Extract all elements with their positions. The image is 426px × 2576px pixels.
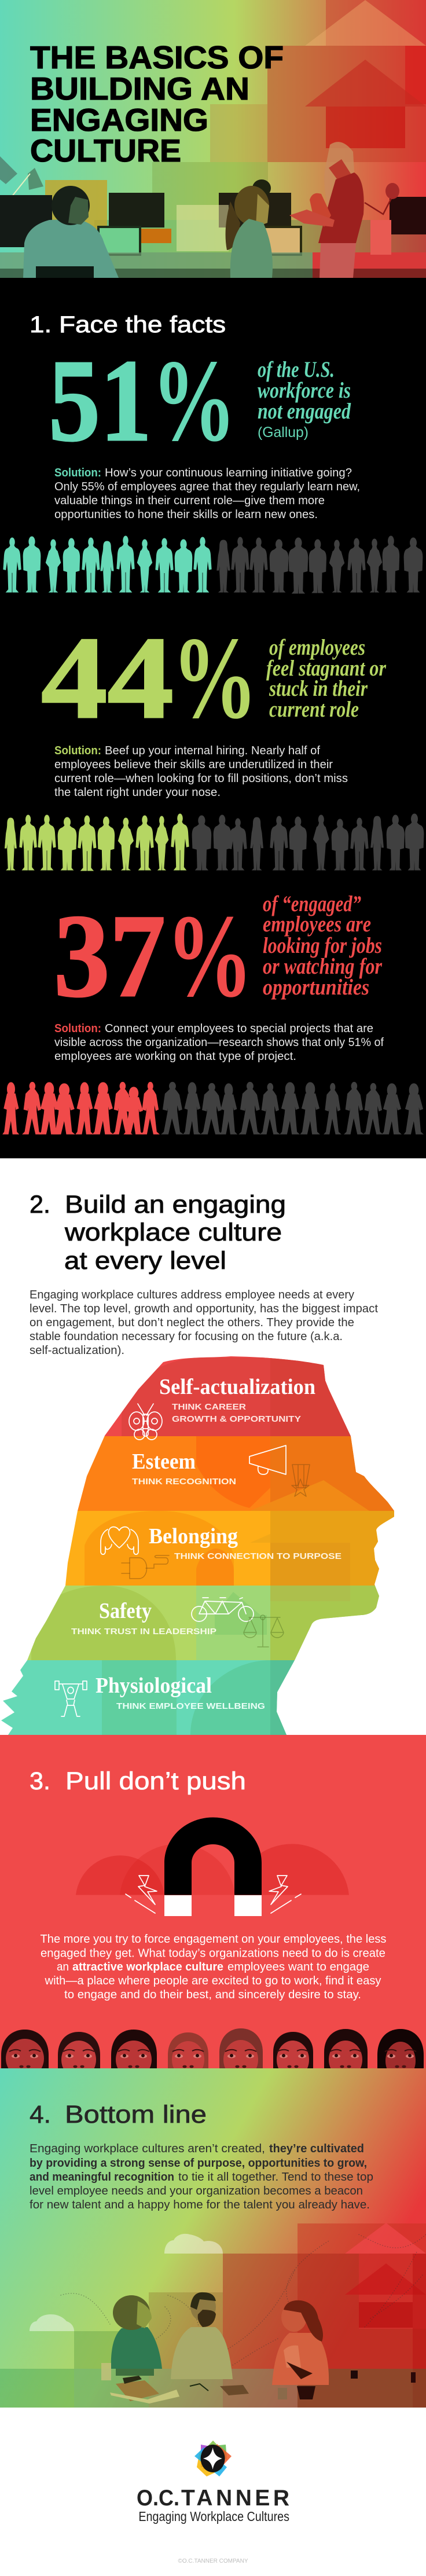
stat description: [266, 635, 387, 722]
row of faces: [1, 2028, 424, 2080]
level: physiological: [55, 1674, 265, 1716]
solution text 1: Solution:: [54, 467, 101, 479]
solution text 3: Solution:: [54, 1022, 101, 1035]
icon: megaphone: [249, 1445, 286, 1474]
solution text 2: the talent right under your nose.: [54, 786, 221, 799]
man with beard: [171, 2292, 233, 2379]
stat: 51%: [49, 335, 351, 465]
photo: standing woman: [289, 142, 364, 278]
level: self-actualization: GROWTH & OPPORTUNITY: [172, 1414, 301, 1424]
panel: build an engaging workplace culture: [1, 1195, 394, 1735]
solution text 2: Beef up your internal hiring. Nearly half of: [105, 744, 320, 757]
intro paragraph: level. The top level, growth and opportunity, has the biggest impact: [30, 1302, 378, 1315]
level: belonging: THINK CONNECTION TO PURPOSE: [174, 1551, 341, 1561]
icon: plug: [122, 1555, 169, 1579]
level: esteem: [132, 1445, 310, 1496]
big number: %: [172, 612, 258, 743]
stat description: workforce is: [258, 378, 351, 403]
big number: [49, 335, 236, 465]
solution text 3: employees are working on that type of project.: [54, 1050, 296, 1063]
heading: 2. Build an engaging workplace culture at every level: at every level: [64, 1247, 226, 1275]
intro paragraph: stable foundation necessary for focusing on the future (a.k.a.: [30, 1330, 343, 1343]
panel: footer: [0, 2408, 426, 2576]
tagline: Engaging Workplace Cultures: [138, 2509, 289, 2524]
heading: 2. Build an engaging workplace culture at every level: [30, 1191, 286, 1275]
big number: [41, 612, 258, 743]
icon: scales: [244, 1615, 284, 1647]
icon: trophy and star: [292, 1465, 310, 1496]
solution text 2: [54, 744, 348, 799]
icon: heart in hands: [101, 1527, 138, 1554]
title: ENGAGING: [30, 102, 208, 138]
solution text 3: Connect your employees to special projects that are: [105, 1022, 373, 1035]
big number: 37: [54, 890, 166, 1022]
heading: 4. Bottom line: Bottom line: [65, 2101, 207, 2129]
panel: header hero: [0, 0, 426, 278]
stat description: [258, 357, 351, 441]
intro paragraph: self-actualization).: [30, 1344, 124, 1357]
heading: 2. Build an engaging workplace culture at every level: Build an engaging: [65, 1191, 286, 1219]
paragraph: [41, 1933, 387, 2001]
logo wordmark: O.C.: [137, 2486, 179, 2511]
solution text 1: How’s your continuous learning initiative going?: [105, 467, 352, 479]
logo wordmark: TANNER: [181, 2486, 289, 2511]
paragraph: with—a place where people are excited to go to work, find it easy: [44, 1975, 381, 1987]
background domes: [76, 1844, 349, 1895]
level: physiological: THINK EMPLOYEE WELLBEING: [116, 1701, 265, 1711]
level: self-actualization: [129, 1375, 315, 1440]
decorative blocks and arrows: [94, 0, 426, 278]
stat description: not engaged: [258, 399, 351, 424]
stat description: looking for jobs: [263, 933, 382, 958]
people row: 44% highlighted: [5, 814, 424, 871]
intro paragraph: Engaging workplace cultures address employee needs at every: [30, 1289, 354, 1301]
title: THE BASICS OF: [30, 39, 284, 75]
solution text 2: current role—when looking for to fill positions, don’t miss: [54, 772, 348, 785]
stat description: employees are: [263, 912, 371, 937]
woman with ponytail: [272, 2300, 329, 2385]
stat description: (Gallup): [258, 424, 309, 441]
stat description: opportunities: [263, 975, 369, 1000]
level: esteem: THINK RECOGNITION: [132, 1477, 236, 1487]
level: esteem: Esteem: [132, 1450, 196, 1474]
paragraph: by providing a strong sense of purpose, opportunities to grow,: [30, 2157, 367, 2170]
logo mark: [194, 2441, 232, 2476]
paragraph: an: [57, 1961, 69, 1973]
paragraph: to tie it all together. Tend to these top: [178, 2171, 373, 2184]
stat: 44%: [41, 612, 387, 743]
big number: 44: [41, 612, 174, 743]
people row: 37% highlighted: [3, 1082, 423, 1134]
people row: 51% highlighted: [3, 536, 423, 593]
title: CULTURE: [30, 133, 181, 168]
big number: %: [152, 335, 236, 465]
paragraph: employees want to engage: [227, 1961, 369, 1973]
paragraph: for new talent and a happy home for the talent you already have.: [30, 2199, 370, 2211]
woman with curly hair: [111, 2295, 162, 2376]
heading: 3. Pull don't push: 3.: [30, 1767, 50, 1795]
table items: [101, 2363, 416, 2403]
solution text 1: opportunities to hone their skills or learn new ones.: [54, 508, 318, 521]
level: safety: [71, 1598, 284, 1647]
big number: %: [166, 890, 253, 1022]
level: physiological: Physiological: [96, 1674, 212, 1698]
big number: [54, 890, 253, 1022]
level: self-actualization: Self-actualization: [159, 1375, 315, 1399]
solution text 2: Solution:: [54, 744, 101, 757]
title: [30, 39, 284, 168]
stat: 37%: [54, 890, 383, 1022]
stat description: of employees: [269, 635, 365, 660]
stat description: of the U.S.: [258, 357, 335, 382]
heading: 4. Bottom line: 4.: [30, 2101, 51, 2129]
icon: clouds: [30, 2234, 223, 2331]
level: safety: Safety: [99, 1599, 152, 1623]
solution text 1: valuable things in their current role—give them more: [54, 494, 325, 507]
panel: face the facts: [0, 278, 426, 1158]
stat description: feel stagnant or: [266, 656, 387, 681]
level: belonging: Belonging: [149, 1524, 238, 1548]
paragraph: to engage and do their best, and sincerely desire to stay.: [64, 1988, 361, 2001]
heading: 2. Build an engaging workplace culture at every level: 2.: [30, 1191, 50, 1219]
icon: tandem bicycle: [192, 1598, 254, 1621]
head silhouette color bands: [0, 1355, 426, 1735]
level: belonging: [101, 1524, 341, 1579]
solution text 1: [54, 467, 360, 521]
stat description: [263, 891, 383, 1000]
solution text 2: employees believe their skills are underutilized in their: [54, 758, 333, 771]
solution text 3: visible across the organization—research shows that only 51% of: [54, 1036, 384, 1049]
heading: 3. Pull don't push: Pull don’t push: [65, 1767, 246, 1795]
solution text 1: Only 55% of employees agree that they regularly learn new,: [54, 480, 360, 493]
title: BUILDING AN: [30, 71, 249, 107]
heading: 2. Build an engaging workplace culture at every level: workplace culture: [64, 1219, 282, 1246]
office photo: [0, 156, 426, 278]
stat description: or watching for: [263, 954, 383, 979]
paragraph: they’re cultivated: [269, 2142, 364, 2155]
icon: lightning bolts: [126, 1876, 301, 1913]
background blocks and arrows: [74, 2223, 426, 2408]
icon: butterfly: [129, 1404, 162, 1440]
heading: 1. Face the facts: 1. Face the facts: [30, 312, 226, 337]
icon: magnet: [164, 1818, 262, 1916]
stat description: of “engaged”: [263, 891, 361, 916]
photo: seated man: [23, 186, 119, 278]
copyright: ©O.C.TANNER COMPANY: [178, 2558, 248, 2564]
photo: seated woman: [226, 179, 273, 278]
paragraph: engaged they get. What today’s organizations need to do is create: [41, 1947, 385, 1960]
icon: weightlifter: [55, 1681, 87, 1716]
level: self-actualization: THINK CAREER: [172, 1402, 246, 1412]
stat description: stuck in their: [269, 676, 368, 701]
intro paragraph: on engagement, but don’t neglect the others. They provide the: [30, 1316, 354, 1329]
photo: meeting table and people: [0, 2292, 426, 2408]
dotted network pattern: [61, 2234, 426, 2368]
paragraph: Engaging workplace cultures aren’t created,: [30, 2142, 265, 2155]
paragraph: attractive workplace culture: [72, 1961, 223, 1973]
solution text 3: [54, 1022, 384, 1063]
paragraph: The more you try to force engagement on your employees, the less: [41, 1933, 387, 1946]
level: safety: THINK TRUST IN LEADERSHIP: [71, 1627, 216, 1636]
big number: 51: [49, 335, 152, 465]
paragraph: [30, 2142, 373, 2211]
paragraph: level employee needs and your organization becomes a beacon: [30, 2185, 363, 2197]
paragraph: and meaningful recognition: [30, 2171, 174, 2184]
panel: pull don't push: [0, 1735, 426, 2080]
intro paragraph: [30, 1289, 378, 1357]
panel: bottom line: [0, 2068, 426, 2408]
stat description: current role: [269, 697, 359, 722]
